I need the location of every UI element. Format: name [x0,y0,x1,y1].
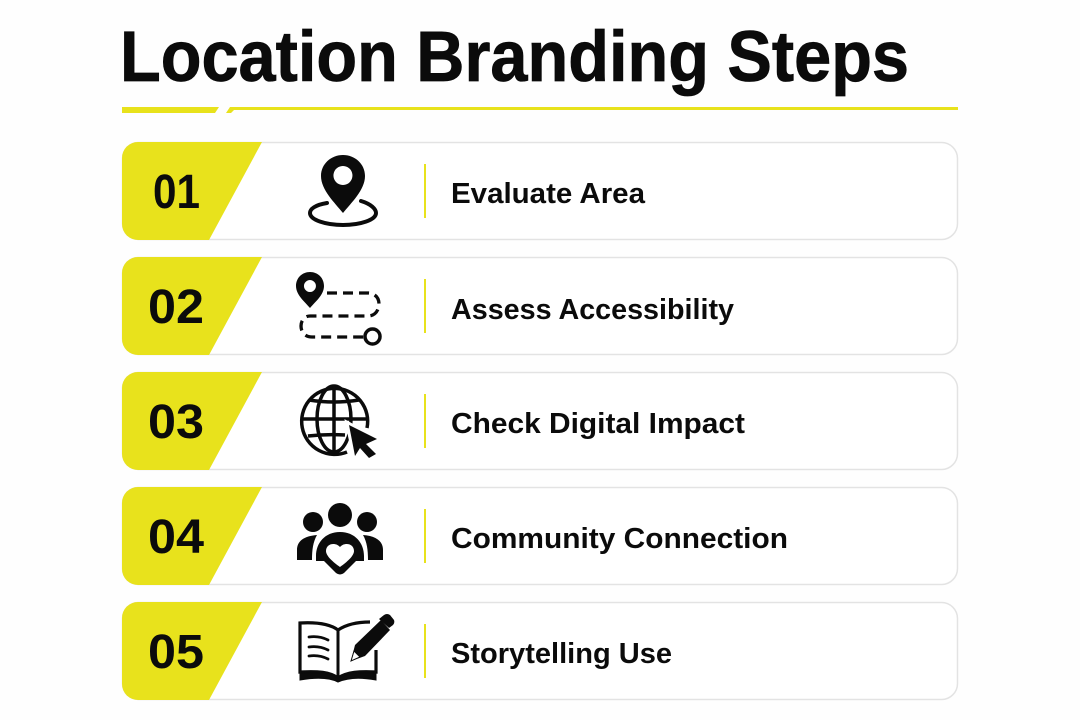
step label: Evaluate Area [451,178,646,210]
divider [424,279,426,333]
divider [424,509,426,563]
step number badge 03 [122,372,262,470]
step label: Assess Accessibility [451,294,734,326]
step number badge 02: 02 [148,281,204,334]
panel: step 4 [122,487,958,585]
step number badge 05: 05 [148,626,204,679]
title underline [122,107,958,113]
step label: Community Connection [451,523,788,555]
panel: step 3 [122,372,958,470]
title: Location Branding Steps [120,18,909,97]
step number badge 01: 01 [153,166,200,219]
step label: Storytelling Use [451,638,672,670]
icon: globe with cursor [302,386,377,458]
step number badge 01 [122,142,262,240]
step number badge 04 [122,487,262,585]
divider [424,624,426,678]
step number badge 05 [122,602,262,700]
divider [424,394,426,448]
divider [424,164,426,218]
icon: community with heart [297,503,383,574]
step number badge 03: 03 [148,396,204,449]
panel: step 5 [122,602,958,700]
icon: open book with pencil [300,614,394,682]
panel: step 2 [122,257,958,355]
panel: step 1 [122,142,958,240]
step number badge 04: 04 [148,511,204,564]
icon: dashed route [296,272,380,344]
icon: map pin on circle [310,155,376,225]
step number badge 02 [122,257,262,355]
step label: Check Digital Impact [451,408,745,440]
